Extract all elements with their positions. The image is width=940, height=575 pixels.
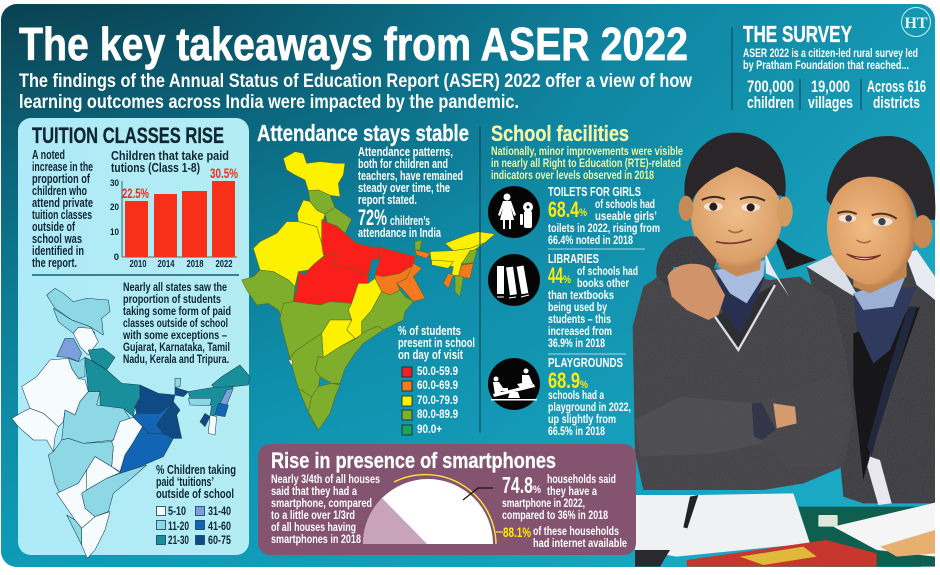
bar chart: children taking paid tuitions: [110, 148, 238, 270]
bar chart: children taking paid tuitions: 2010: [130, 259, 147, 270]
girl right body: [807, 250, 935, 503]
legend: attendance map: % of students: [398, 324, 461, 338]
heading: Attendance stays stable: [257, 120, 469, 146]
toilets for girls: 66.4% noted in 2018: [548, 233, 633, 247]
text block: smartphones right: had internet available: [533, 536, 627, 550]
text block: tuition intro: A noted: [32, 148, 65, 162]
panel: the survey: 19,000: [811, 77, 850, 96]
text block: smartphones left: to a little over 1/3rd: [271, 508, 355, 522]
bar chart: children taking paid tuitions: 30.5%: [210, 165, 238, 181]
toilets for girls: [548, 184, 660, 249]
heading: School facilities: [491, 121, 629, 146]
text block: smartphones left: [271, 472, 380, 546]
libraries: increased from: [548, 324, 612, 338]
heading: TUITION CLASSES RISE: [32, 123, 224, 148]
panel: the survey: villages: [808, 93, 853, 112]
text block: tuition intro: the report.: [32, 256, 77, 270]
panel: the survey: THE SURVEY: [743, 21, 852, 47]
panel: the survey: districts: [873, 93, 920, 112]
text block: attendance patterns: [358, 145, 463, 240]
text block: tuition intro: attend private: [32, 196, 93, 210]
panel: tuition classes rise: [12, 118, 250, 558]
arm around shoulder: [656, 236, 717, 287]
girl right head: [827, 170, 916, 285]
playgrounds: playground in 2022,: [548, 400, 631, 414]
bar chart: children taking paid tuitions: 0: [114, 252, 119, 263]
toilets for girls: %: [579, 207, 587, 219]
text block: smartphones right: %: [533, 484, 541, 496]
text block: smartphones right: 74.8: [502, 472, 533, 498]
panel: the survey: 700,000: [747, 77, 794, 96]
text block: smartphones left: said that they had a: [271, 484, 357, 498]
text block: tuition intro: proportion of: [32, 172, 91, 186]
libraries: books other: [577, 276, 629, 290]
bar chart: children taking paid tuitions: 2022: [216, 259, 233, 270]
text block: state exceptions: proportion of students: [123, 292, 221, 306]
text block: smartphones left: smartphone, compared: [271, 496, 372, 510]
legend: attendance map: [398, 324, 475, 436]
heading: Rise in presence of smartphones: [271, 448, 556, 473]
bar chart: children taking paid tuitions: 22.5%: [122, 185, 149, 201]
text block: smartphones right: 88.1%: [503, 524, 531, 540]
panel: the survey: children: [747, 93, 794, 112]
girl left body: [633, 267, 853, 490]
text block: tuition intro: outside of: [32, 220, 76, 234]
text block: attendance patterns: 72%: [358, 205, 387, 230]
icon: library books: [488, 254, 540, 306]
text block: smartphones left: Nearly 3/4th of all houses: [271, 472, 380, 486]
toilets for girls: useable girls’: [595, 209, 657, 223]
text block: smartphones right: smartphone in 2022,: [502, 496, 585, 510]
libraries: 36.9% in 2018: [548, 336, 605, 350]
subtitle: learning outcomes across India were impacted by the pandemic.: [19, 92, 519, 113]
playgrounds: up slightly from: [548, 412, 616, 426]
text block: tuition intro: [32, 148, 93, 270]
text block: state exceptions: Gujarat, Karnataka, Tamil: [123, 340, 230, 354]
playgrounds: 68.9: [548, 368, 580, 393]
text block: tuition intro: school was: [32, 232, 82, 246]
legend: tuition map: paid ‘tuitions’: [156, 475, 214, 489]
open notebook and table: [798, 503, 935, 567]
text block: tuition intro: identified in: [32, 244, 84, 258]
subtitle: [19, 71, 692, 113]
text block: tuition intro: tuition classes: [32, 208, 92, 222]
libraries: LIBRARIES: [548, 251, 599, 266]
playgrounds: 66.5% in 2018: [548, 424, 605, 438]
text block: state exceptions: classes outside of school: [123, 316, 228, 330]
title: The key takeaways from ASER 2022: [19, 18, 688, 70]
text block: attendance patterns: both for children and: [358, 157, 448, 171]
text block: facilities intro: in nearly all Right to Education (RTE)-related: [491, 156, 681, 170]
text block: attendance patterns: steady over time, the: [358, 181, 450, 195]
text block: state exceptions: with some exceptions –: [122, 328, 227, 342]
libraries: students – this: [548, 312, 611, 326]
bar chart: children taking paid tuitions: Children that take paid: [111, 148, 229, 163]
bar chart: children taking paid tuitions: tutions (Class 1-8): [111, 160, 200, 175]
icon: HT logo: HT: [904, 15, 928, 32]
text block: state exceptions: Nadu, Kerala and Tripura.: [123, 352, 229, 366]
legend: tuition map: % Children taking: [156, 463, 236, 477]
legend: attendance map: present in school: [398, 336, 475, 350]
legend: attendance map: 80.0-89.9: [417, 409, 458, 421]
toilets for girls: TOILETS FOR GIRLS: [548, 184, 641, 199]
photo: two schoolgirls in uniform: [633, 133, 935, 567]
subtitle: The findings of the Annual Status of Education Report (ASER) 2022 offer a view of how: [19, 71, 692, 92]
toilets for girls: of schools had: [595, 197, 655, 211]
icon: toilets: [488, 186, 540, 238]
playgrounds: [548, 355, 631, 438]
panel: rise in presence of smartphones: [258, 444, 636, 555]
icon: HT logo: [902, 8, 930, 36]
legend: tuition map: 11-20: [168, 521, 189, 533]
legend: attendance map: 90.0+: [417, 424, 442, 436]
libraries: %: [563, 274, 571, 286]
libraries: of schools had: [577, 264, 638, 278]
girl right neck: [853, 253, 907, 293]
text block: facilities intro: indicators over levels observed in 2018: [491, 168, 654, 182]
bar chart: children taking paid tuitions: 20: [110, 202, 119, 213]
text block: attendance patterns: teachers, have remained: [358, 169, 463, 183]
text block: state exceptions: [122, 280, 231, 366]
text block: smartphones left: of all houses having: [271, 520, 356, 534]
text block: state exceptions: Nearly all states saw the: [123, 280, 227, 294]
panel: the survey: [732, 21, 926, 112]
bar chart: children taking paid tuitions: 2018: [186, 259, 204, 270]
text block: tuition intro: increase in the: [32, 160, 93, 174]
legend: tuition map: 21-30: [168, 535, 189, 547]
libraries: [548, 251, 638, 354]
panel: school facilities: [488, 121, 683, 438]
bar chart: children taking paid tuitions: 30: [110, 178, 119, 189]
toilets for girls: toilets in 2022, rising from: [548, 221, 660, 235]
text block: smartphones right: [502, 472, 627, 550]
text block: attendance patterns: report stated.: [358, 193, 417, 207]
legend: tuition map: 41-60: [208, 521, 231, 533]
text block: attendance patterns: children’s: [390, 214, 430, 228]
libraries: than textbooks: [548, 288, 614, 302]
playgrounds: PLAYGROUNDS: [548, 355, 623, 370]
legend: attendance map: 50.0-59.9: [417, 366, 458, 378]
playgrounds: schools had a: [548, 388, 604, 402]
text block: attendance patterns: attendance in India: [358, 226, 442, 240]
legend: tuition map: [156, 463, 236, 547]
map: children taking tuitions by state: [12, 288, 250, 558]
legend: tuition map: outside of school: [156, 487, 234, 501]
playgrounds: %: [580, 379, 588, 391]
icon: playground seesaw: [488, 358, 540, 410]
text block: tuition intro: children who: [32, 184, 87, 198]
bar chart: children taking paid tuitions: 10: [110, 227, 119, 238]
legend: tuition map: 5-10: [168, 506, 186, 518]
text block: smartphones right: households said: [547, 472, 616, 486]
text block: facilities intro: [491, 144, 683, 182]
bar chart: children taking paid tuitions: 2014: [158, 259, 175, 270]
libraries: 44: [548, 263, 563, 288]
legend: attendance map: 70.0-79.9: [417, 395, 458, 407]
text block: attendance patterns: Attendance patterns,: [358, 145, 453, 159]
legend: tuition map: 60-75: [208, 535, 231, 547]
toilets for girls: 68.4: [548, 197, 580, 222]
text block: smartphones right: of these households: [533, 524, 619, 538]
legend: attendance map: on day of visit: [398, 348, 464, 362]
panel: attendance stays stable: [242, 120, 495, 436]
libraries: being used by: [548, 300, 607, 314]
text block: facilities intro: Nationally, minor improvements were visible: [491, 144, 683, 158]
text block: smartphones left: smartphones in 2018: [271, 532, 361, 546]
text block: smartphones right: compared to 36% in 2018: [502, 508, 608, 522]
hair and face left: [773, 235, 817, 270]
map: attendance by state: [242, 152, 495, 430]
legend: tuition map: 31-40: [208, 506, 231, 518]
text block: smartphones right: they have a: [547, 484, 597, 498]
text block: state exceptions: taking some form of paid: [123, 304, 231, 318]
chart: semicircle 74.8%: [363, 475, 503, 544]
legend: attendance map: 60.0-69.9: [417, 380, 458, 392]
